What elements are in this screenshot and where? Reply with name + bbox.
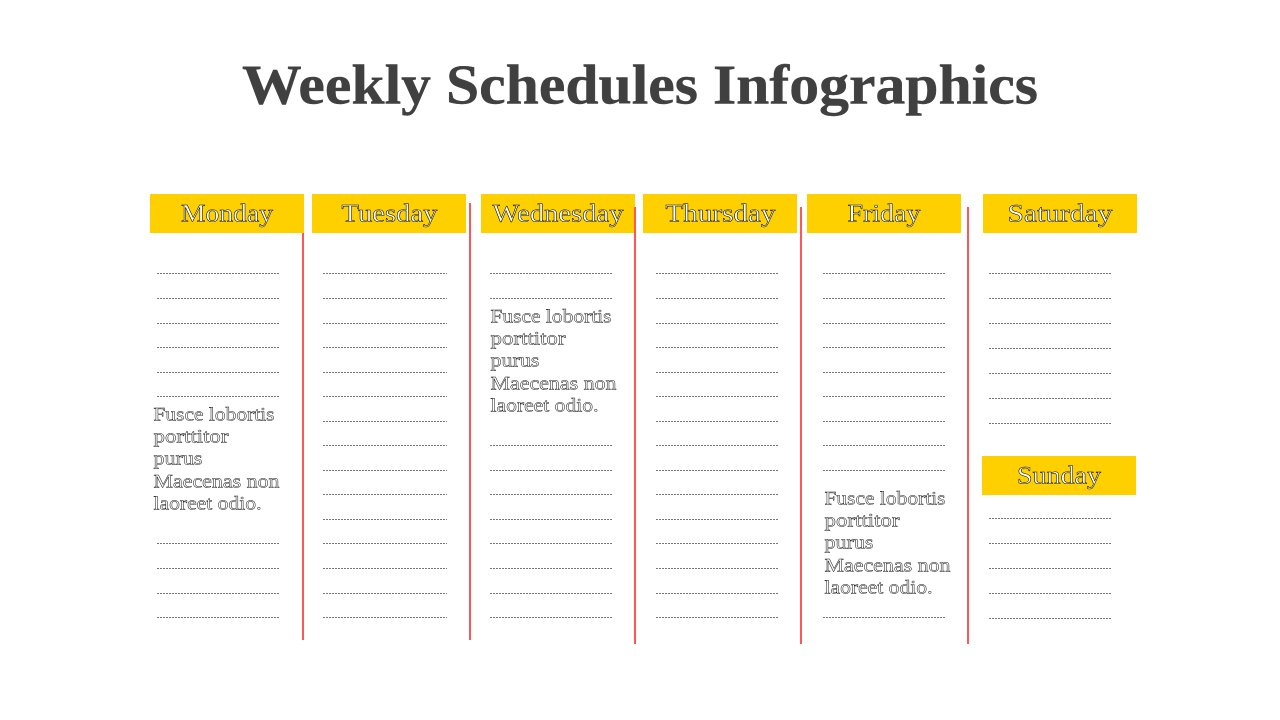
column: Sunday <box>982 456 1136 618</box>
column: Saturday <box>983 194 1137 424</box>
writing lines: Wednesday <box>490 274 613 618</box>
text block: Monday note: Fusce lobortis <box>154 404 274 426</box>
text block: Friday note: laoreet odio. <box>824 578 932 598</box>
divider: Thursday and Friday <box>800 207 802 644</box>
header: Tuesday <box>312 194 466 233</box>
column: Monday <box>150 194 304 618</box>
column: Thursday <box>643 194 797 618</box>
writing lines: Monday <box>157 274 280 618</box>
text block: Monday note: laoreet odio. <box>154 494 262 514</box>
text block: Wednesday note: porttitor <box>490 328 566 350</box>
text block: Wednesday note: purus <box>490 350 540 372</box>
divider: Monday and Tuesday <box>302 233 304 640</box>
header: Thursday: Thursday <box>666 200 776 228</box>
text block: Wednesday note <box>490 306 617 416</box>
text block: Friday note: purus <box>824 532 874 554</box>
text block: Friday note: Fusce lobortis <box>824 488 946 510</box>
divider: Friday and Saturday <box>967 207 969 644</box>
header: Friday: Friday <box>848 200 921 228</box>
header: Thursday <box>643 194 797 233</box>
writing lines: Saturday <box>989 274 1111 424</box>
text block: Friday note <box>824 488 951 598</box>
header: Sunday: Sunday <box>1017 462 1102 490</box>
header: Friday <box>807 194 961 233</box>
writing lines: Tuesday <box>323 274 447 618</box>
header: Monday: Monday <box>181 200 274 228</box>
column: Wednesday <box>481 194 635 618</box>
header: Wednesday: Wednesday <box>492 200 624 228</box>
divider: Wednesday and Thursday <box>634 207 636 644</box>
text block: Monday note: porttitor <box>154 426 229 448</box>
header: Saturday <box>983 194 1137 233</box>
text block: Friday note: porttitor <box>824 510 900 532</box>
text block: Wednesday note: Maecenas non <box>490 374 617 394</box>
writing lines: Friday <box>823 274 945 618</box>
writing lines: Thursday <box>656 274 778 618</box>
header: Sunday <box>982 456 1136 495</box>
column: Tuesday <box>312 194 466 618</box>
header: Monday <box>150 194 304 233</box>
column: Friday <box>807 194 961 618</box>
header: Tuesday: Tuesday <box>342 200 438 228</box>
text block: Monday note <box>154 404 280 514</box>
title: Weekly Schedules Infographics <box>242 54 1038 116</box>
divider: Tuesday and Wednesday <box>469 203 471 640</box>
text block: Wednesday note: laoreet odio. <box>490 396 598 416</box>
text block: Monday note: purus <box>154 448 202 470</box>
text block: Wednesday note: Fusce lobortis <box>490 306 612 328</box>
header: Wednesday <box>481 194 635 233</box>
header: Saturday: Saturday <box>1008 200 1113 228</box>
text block: Friday note: Maecenas non <box>824 556 951 576</box>
text block: Monday note: Maecenas non <box>154 472 280 492</box>
writing lines: Sunday <box>989 518 1111 618</box>
